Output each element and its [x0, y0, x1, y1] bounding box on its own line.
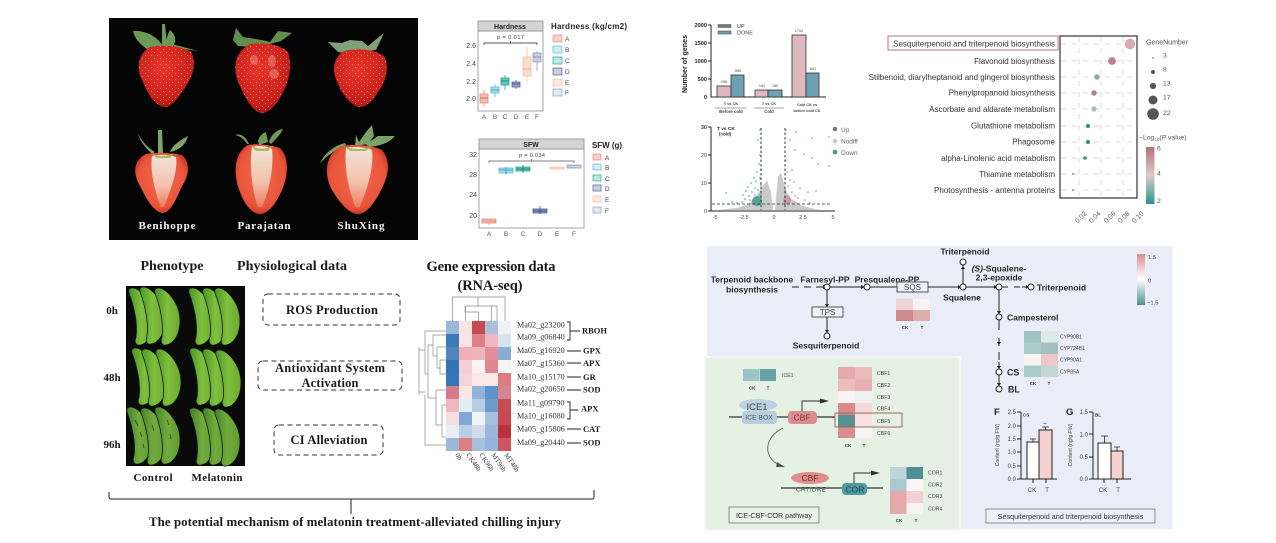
- chart: number of genes bar chart: 590: [735, 69, 741, 73]
- heatmap: CYP genes: CYP85A: [1060, 370, 1080, 376]
- chart F: CS content bars: CK: [1028, 487, 1037, 494]
- heatmap: CYP genes: [1024, 331, 1085, 386]
- chart: volcano plot: 0: [772, 215, 776, 221]
- chart G: BL content bars: T: [1116, 487, 1120, 494]
- chart F: CS content bars: 0.5: [1008, 464, 1017, 470]
- chart G: BL content bars: 1.0: [1080, 432, 1089, 438]
- chart: gene expression heatmap: [419, 297, 607, 474]
- column labels: 0h: [453, 452, 464, 462]
- chart: SFW box plot: E: [555, 231, 560, 238]
- gene family labels: GR: [583, 372, 597, 382]
- box: ROS Production: ROS Production: [286, 303, 378, 317]
- label: Benihoppe: Benihoppe: [138, 220, 196, 232]
- legend: P value colour bar: 2: [1157, 198, 1161, 205]
- legend: Hardness groups: A: [565, 36, 570, 43]
- column labels: MT48h: [502, 452, 521, 474]
- chart: SFW box plot: A: [487, 231, 492, 238]
- chart: KEGG pathway enrichment bubble plot: 0.04: [1088, 210, 1103, 225]
- box: Antioxidant System Activation: [258, 361, 402, 390]
- chart: number of genes bar chart: 180: [772, 84, 778, 88]
- chart: number of genes bar chart: Cold: [764, 109, 774, 114]
- legend: UP and DOWN bars: DONE: [737, 30, 753, 36]
- chart: number of genes bar chart: 191: [759, 84, 765, 88]
- row labels: Ma10_g16080: [517, 412, 565, 420]
- chart: SFW box plot: 28: [469, 172, 477, 179]
- diagram: ICE1 activates CBF: ICE BOX: [745, 414, 773, 422]
- heading: Phenotype: Phenotype: [140, 259, 204, 274]
- legend: Hardness groups: D: [565, 69, 570, 76]
- chart: Hardness box plot: 2.6: [466, 43, 476, 50]
- heading: Gene expression data (RNA-seq): [426, 259, 556, 294]
- label: ShuXing: ShuXing: [338, 220, 385, 232]
- row labels: [517, 320, 565, 447]
- legend: P value colour bar: (: [1159, 134, 1162, 142]
- legend: gene number: 22: [1163, 110, 1171, 117]
- chart: Hardness box plot: C: [503, 114, 508, 121]
- diagram: terpenoid biosynthesis pathway: Triterpenoid: [1037, 282, 1086, 292]
- box: Antioxidant System Activation: Antioxidant System: [275, 361, 386, 375]
- chart: number of genes bar chart: 500: [698, 77, 707, 83]
- chart: volcano plot: 30: [701, 125, 707, 131]
- column labels: MT96h: [489, 452, 508, 474]
- legend: SFW groups: E: [605, 197, 610, 204]
- chart: KEGG pathway enrichment bubble plot: Ascorbate and aldarate metabolism: [929, 105, 1055, 114]
- chart: KEGG pathway enrichment bubble plot: alpha-Linolenic acid metabolism: [941, 154, 1055, 163]
- chart G: BL content bars: Content (ng/g FW): [1068, 423, 1074, 466]
- box: ROS Production: [263, 294, 400, 325]
- chart: Hardness box plot: B: [493, 114, 497, 121]
- chart: SFW box plot: D: [538, 231, 543, 238]
- chart: number of genes bar chart: 2000: [695, 23, 707, 29]
- photo: Benihoppe whole fruit: [133, 24, 198, 107]
- diagram: terpenoid biosynthesis pathway: (S)-Squalene-: [972, 264, 1027, 274]
- diagram: terpenoid biosynthesis pathway: [711, 246, 1086, 394]
- row labels: Ma09_g06840: [517, 332, 565, 342]
- legend: Hardness groups: C: [565, 58, 570, 65]
- chart F: CS content bars: 2.5: [1008, 410, 1017, 416]
- chart: SFW box plot: p = 0.034: [519, 153, 546, 159]
- caption box: sesquiterpenoid and triterpenoid biosynthesis: Sesquiterpenoid and triterpenoid biosynthesis: [998, 512, 1144, 521]
- chart: KEGG pathway enrichment bubble plot: [869, 36, 1189, 225]
- gene family labels: APX: [581, 404, 599, 414]
- legend: SFW groups: B: [605, 165, 609, 172]
- chart: volcano plot: -2.5: [739, 215, 749, 221]
- chart: KEGG pathway enrichment bubble plot: Phagosome: [1012, 138, 1056, 146]
- heatmap: ICE1: T: [767, 386, 770, 390]
- highlight box: sesquiterpenoid pathway: [888, 36, 1058, 50]
- labels: time points: 96h: [103, 439, 121, 451]
- legend: P value colour bar: [1139, 134, 1187, 205]
- legend: expression colour scale: −1.5: [1147, 300, 1158, 306]
- chart: KEGG pathway enrichment bubble plot: 0.02: [1074, 210, 1089, 225]
- heatmap: ICE1: ICE1: [782, 373, 794, 379]
- chart F: CS content bars: [994, 407, 1057, 494]
- diagram: terpenoid biosynthesis pathway: Farnesyl-PP: [800, 274, 850, 284]
- chart: Hardness box plot: A: [482, 114, 487, 121]
- chart: KEGG pathway enrichment bubble plot: Phenylpropanoid biosynthesis: [949, 88, 1055, 98]
- chart: KEGG pathway enrichment bubble plot: Sesquiterpenoid and triterpenoid biosynthesis: [893, 40, 1055, 48]
- gene family labels: SOD: [583, 384, 600, 394]
- panel: sesquiterpenoid and triterpenoid biosynthesis background: [707, 246, 1172, 529]
- chart: Hardness box plot: p = 0.017: [497, 35, 524, 41]
- chart: number of genes bar chart: [682, 23, 826, 114]
- photo: Parajatan cut fruit: [235, 129, 287, 214]
- labels: treatment groups: Melatonin: [192, 472, 242, 484]
- chart: SFW box plot: B: [504, 231, 508, 238]
- heatmap: COR genes: T: [915, 518, 918, 523]
- diagram: CBF activates COR: CBF: [802, 473, 818, 483]
- legend: expression colour scale: [1137, 254, 1158, 306]
- diagram: terpenoid biosynthesis pathway: Triterpenoid: [940, 246, 990, 256]
- chart: SFW box plot: 20: [469, 213, 477, 220]
- panel: banana photographs: [126, 286, 245, 466]
- photos: 96 h bananas: [127, 407, 240, 466]
- chart F: CS content bars: 2.0: [1008, 424, 1017, 430]
- chart: number of genes bar chart: T vs CK: [762, 102, 776, 106]
- column labels: CK48h: [464, 452, 483, 473]
- legend: gene number: 17: [1163, 94, 1171, 102]
- chart: Hardness box plot: [466, 21, 543, 121]
- chart: KEGG pathway enrichment bubble plot: Thiamine metabolism: [979, 170, 1055, 179]
- chart: number of genes bar chart: 1702: [795, 29, 803, 33]
- labels: treatment groups: [134, 472, 242, 484]
- legend: UP and DOWN bars: UP: [737, 24, 745, 30]
- chart F: CS content bars: 1.5: [1008, 437, 1017, 443]
- chart: KEGG pathway enrichment bubble plot: Stilbenoid, diarylheptanoid and gingerol biosynthesis: [869, 73, 1055, 82]
- row labels: Ma09_g20440: [517, 438, 565, 447]
- column labels: [453, 452, 521, 474]
- photos: 0 h bananas: [129, 287, 240, 345]
- chart F: CS content bars: 1.0: [1008, 450, 1017, 456]
- heatmap: SQS expression: CK: [902, 325, 909, 330]
- heatmap: CBF genes: T: [863, 443, 866, 448]
- data points: up-regulated: [784, 129, 830, 204]
- photo: ShuXing whole fruit: [328, 33, 387, 107]
- chart: Hardness box plot: Hardness: [494, 24, 526, 31]
- chart G: BL content bars: 1.5: [1080, 410, 1089, 416]
- row labels: Ma05_g15806: [517, 424, 565, 434]
- legend: SFW groups: C: [605, 176, 610, 183]
- diagram: CBF activates COR: COR: [846, 484, 864, 494]
- chart: KEGG pathway enrichment bubble plot: 0.06: [1103, 210, 1118, 225]
- heatmap: COR genes: [890, 467, 943, 523]
- heatmap: CBF genes: CK: [845, 443, 852, 448]
- photo: Benihoppe cut fruit: [135, 130, 188, 213]
- heatmap: CBF genes: CBF1: [877, 371, 890, 377]
- box: CI Alleviation: CI Alleviation: [290, 433, 368, 447]
- caption box: ICE-CBF-COR pathway: [729, 507, 819, 523]
- chart: volcano plot: 2.5: [799, 215, 807, 221]
- chart G: BL content bars: CK: [1099, 487, 1108, 494]
- chart: volcano plot: 20: [701, 153, 707, 159]
- arrow: curved cascade: [768, 428, 785, 467]
- chart: number of genes bar chart: Number of genes: [682, 35, 689, 93]
- chart G: BL content bars: G: [1066, 407, 1073, 418]
- legend: gene number: 13: [1163, 80, 1171, 88]
- chart: SFW box plot: [469, 139, 584, 238]
- legend: gene number: [1146, 40, 1189, 120]
- panel: ICE-CBF-COR pathway background: [705, 357, 960, 530]
- heatmap: CYP genes: CYP90B1: [1060, 334, 1082, 340]
- gene family labels: CAT: [583, 424, 601, 434]
- label: Parajatan: Parajatan: [238, 220, 290, 232]
- chart G: BL content bars: [1066, 407, 1131, 494]
- legend: Hardness groups: Hardness (kg/cm2): [551, 22, 627, 31]
- legend: volcano categories: [833, 127, 858, 157]
- enzyme box: TPS: TPS: [820, 308, 835, 317]
- heatmap: CYP genes: CYP90A1: [1060, 358, 1082, 364]
- chart: Hardness box plot: 2.2: [466, 79, 476, 86]
- diagram: terpenoid biosynthesis pathway: biosynthesis: [726, 284, 778, 294]
- heatmap: CYP genes: T: [1048, 381, 1051, 386]
- row labels: Ma02_g20650: [517, 384, 565, 394]
- chart: KEGG pathway enrichment bubble plot: Flavonoid biosynthesis: [974, 57, 1055, 66]
- photo: ShuXing cut fruit: [320, 125, 395, 214]
- chart: number of genes bar chart: Cold CK vs: [797, 103, 817, 107]
- legend: expression colour scale: 1.5: [1148, 255, 1156, 261]
- chart: SFW box plot: SFW: [523, 142, 539, 149]
- legend: gene number: 3: [1163, 52, 1167, 60]
- diagram: ICE1 activates CBF: CBF: [794, 412, 810, 422]
- legend: SFW groups: D: [605, 186, 610, 193]
- dendrogram: columns: [452, 297, 505, 321]
- caption box: ICE-CBF-COR pathway: ICE-CBF-COR pathway: [736, 511, 812, 520]
- gene family labels: [567, 322, 607, 448]
- legend: UP and DOWN bars: [718, 24, 753, 36]
- photos: 48 h bananas: [132, 348, 241, 407]
- chart F: CS content bars: T: [1045, 487, 1049, 494]
- heatmap: COR genes: COR1: [928, 470, 943, 476]
- chart: number of genes bar chart: 1000: [695, 59, 707, 65]
- row labels: Ma07_g15360: [517, 359, 565, 368]
- chart: volcano plot: 10: [701, 181, 707, 187]
- heatmap: COR genes: COR4: [928, 506, 943, 512]
- chart G: BL content bars: 0.5: [1080, 455, 1089, 461]
- heatmap: SQS expression: [896, 299, 930, 330]
- chart: volcano plot: -5: [713, 215, 717, 221]
- chart G: BL content bars: BL: [1095, 412, 1101, 418]
- chart: Hardness box plot: D: [514, 114, 519, 121]
- chart: SFW box plot: 32: [469, 152, 477, 159]
- chart: KEGG pathway enrichment bubble plot: 0.10: [1131, 210, 1146, 225]
- heading: Gene expression data (RNA-seq): (RNA-seq): [458, 278, 523, 294]
- legend: gene number: 8: [1163, 66, 1167, 74]
- chart: Hardness box plot: E: [525, 114, 530, 121]
- chart: SFW box plot: F: [572, 231, 576, 238]
- gene family labels: RBOH: [582, 326, 607, 336]
- chart: SFW box plot: C: [521, 231, 526, 238]
- labels: treatment groups: Control: [134, 472, 172, 484]
- caption box: sesquiterpenoid and triterpenoid biosynthesis: [986, 509, 1155, 523]
- chart: number of genes bar chart: 295: [721, 80, 727, 84]
- chart F: CS content bars: 0.0: [1008, 477, 1017, 483]
- heatmap: COR genes: COR2: [928, 482, 943, 488]
- diagram: terpenoid biosynthesis pathway: Campesterol: [1007, 312, 1058, 322]
- labels: time points: 0h: [106, 305, 118, 317]
- gene family labels: SOD: [583, 438, 600, 448]
- heatmap: CBF genes: CBF2: [877, 383, 890, 389]
- legend: SFW groups: [592, 141, 622, 215]
- chart: number of genes bar chart: before cold CK: [793, 109, 821, 113]
- chart: number of genes bar chart: 641: [810, 67, 816, 71]
- legend: P value colour bar: P value): [1162, 134, 1187, 142]
- chart: SFW box plot: 24: [469, 192, 477, 199]
- caption: potential mechanism: The potential mechanism of melatonin treatment-alleviated chilling injury: [149, 515, 562, 529]
- legend: P value colour bar: 10: [1154, 137, 1160, 142]
- heatmap: COR genes: CK: [896, 518, 903, 523]
- heatmap: ICE1: CK: [749, 386, 756, 390]
- heatmap: CBF genes: CBF5: [877, 419, 890, 425]
- diagram: CBF activates COR: CRT/DRE: [796, 486, 827, 494]
- diagram: ICE1 activates CBF: ICE1: [746, 402, 768, 413]
- diagram: terpenoid biosynthesis pathway: Squalene: [943, 292, 981, 302]
- legend: volcano categories: Down: [841, 150, 858, 157]
- legend: Hardness groups: F: [565, 90, 569, 97]
- chart: volcano plot: [701, 125, 858, 221]
- legend: SFW groups: F: [605, 208, 609, 215]
- diagram: terpenoid biosynthesis pathway: Terpenoid backbone: [711, 274, 794, 284]
- legend: P value colour bar: 6: [1157, 146, 1161, 152]
- chart: Hardness box plot: F: [535, 114, 539, 121]
- legend: P value colour bar: −Log: [1139, 134, 1154, 142]
- chart: Hardness box plot: 2.4: [466, 61, 476, 68]
- chart: KEGG pathway enrichment bubble plot: Photosynthesis - antenna proteins: [934, 186, 1055, 195]
- diagram: terpenoid biosynthesis pathway: Sesquiterpenoid: [793, 340, 859, 350]
- heatmap: CBF genes: CBF6: [877, 431, 890, 437]
- row labels: Ma02_g23200: [517, 320, 565, 330]
- heatmap: CBF genes: [835, 367, 902, 448]
- box: CI Alleviation: [274, 425, 383, 455]
- chart F: CS content bars: F: [994, 407, 1000, 418]
- heatmap: COR genes: COR3: [928, 494, 943, 500]
- row labels: Ma10_g15170: [517, 372, 565, 382]
- heading: Gene expression data (RNA-seq): Gene expression data: [426, 259, 556, 275]
- chart: number of genes bar chart: 1500: [695, 41, 707, 47]
- legend: SFW groups: SFW (g): [592, 141, 622, 150]
- legend: P value colour bar: 4: [1157, 170, 1161, 178]
- dendrogram: rows: [419, 331, 446, 445]
- gene family labels: GPX: [583, 346, 602, 356]
- heatmap: CBF genes: CBF3: [877, 395, 890, 401]
- chart F: CS content bars: Content (ng/g FW): [995, 423, 1001, 466]
- legend: SFW groups: A: [605, 155, 610, 162]
- enzyme box: TPS: [812, 307, 843, 317]
- legend: gene number: GeneNumber: [1146, 40, 1189, 46]
- chart: KEGG pathway enrichment bubble plot: Glutathione metabolism: [971, 122, 1055, 130]
- diagram: terpenoid biosynthesis pathway: Presqualene-PP: [855, 274, 920, 284]
- diagram: terpenoid biosynthesis pathway: BL: [1008, 384, 1020, 394]
- chart: number of genes bar chart: T vs CK: [724, 102, 738, 106]
- diagram: ICE1 activates CBF: [729, 398, 835, 467]
- chart: number of genes bar chart: Before cold: [719, 109, 743, 114]
- heatmap: CYP genes: CYP724B1: [1060, 346, 1085, 352]
- row labels: Ma11_g09790: [517, 398, 564, 408]
- chart: volcano plot: (cold): [719, 132, 732, 136]
- legend: Hardness groups: E: [565, 80, 570, 87]
- box: Antioxidant System Activation: Activation: [302, 376, 359, 390]
- heatmap: CBF genes: CBF4: [877, 406, 890, 412]
- diagram: terpenoid biosynthesis pathway: CS: [1007, 368, 1019, 378]
- panel: strawberry photographs: [109, 18, 418, 240]
- heatmap: SQS expression: T: [921, 325, 924, 330]
- row labels: Ma05_g16920: [517, 346, 565, 355]
- chart: KEGG pathway enrichment bubble plot: 0.08: [1117, 210, 1132, 225]
- chart G: BL content bars: 0.0: [1080, 477, 1089, 483]
- chart: number of genes bar chart: 0: [704, 95, 707, 101]
- chart: volcano plot: 5: [831, 215, 835, 221]
- bracket: combined mechanism: [109, 490, 594, 514]
- chart: volcano plot: T vs CK: [717, 126, 735, 132]
- data points: down-regulated: [725, 129, 762, 205]
- legend: volcano categories: Up: [841, 127, 850, 134]
- photo: Parajatan whole fruit: [233, 28, 292, 113]
- legend: expression colour scale: 0: [1148, 278, 1151, 284]
- labels: time points: 48h: [103, 372, 121, 384]
- chart: Hardness box plot: 2.0: [466, 96, 476, 103]
- enzyme box: SQS: [897, 282, 928, 292]
- chart F: CS content bars: **: [1043, 422, 1047, 426]
- diagram: terpenoid biosynthesis pathway: 2,3-epoxide: [976, 272, 1023, 282]
- legend: Hardness groups: B: [565, 47, 569, 54]
- heatmap: CYP genes: CK: [1030, 381, 1037, 386]
- chart: volcano plot: 0: [704, 209, 707, 215]
- gene family labels: APX: [583, 358, 601, 368]
- legend: Hardness groups: [551, 22, 627, 97]
- chart F: CS content bars: CS: [1023, 412, 1029, 418]
- legend: volcano categories: Nodiff: [841, 138, 858, 146]
- labels: time points: [103, 305, 121, 451]
- enzyme box: SQS: SQS: [904, 283, 921, 292]
- diagram: CBF activates COR: [781, 470, 883, 495]
- column labels: CK96h: [477, 452, 496, 473]
- heading: Physiological data: Physiological data: [237, 259, 347, 274]
- heatmap: ICE1: [743, 369, 794, 390]
